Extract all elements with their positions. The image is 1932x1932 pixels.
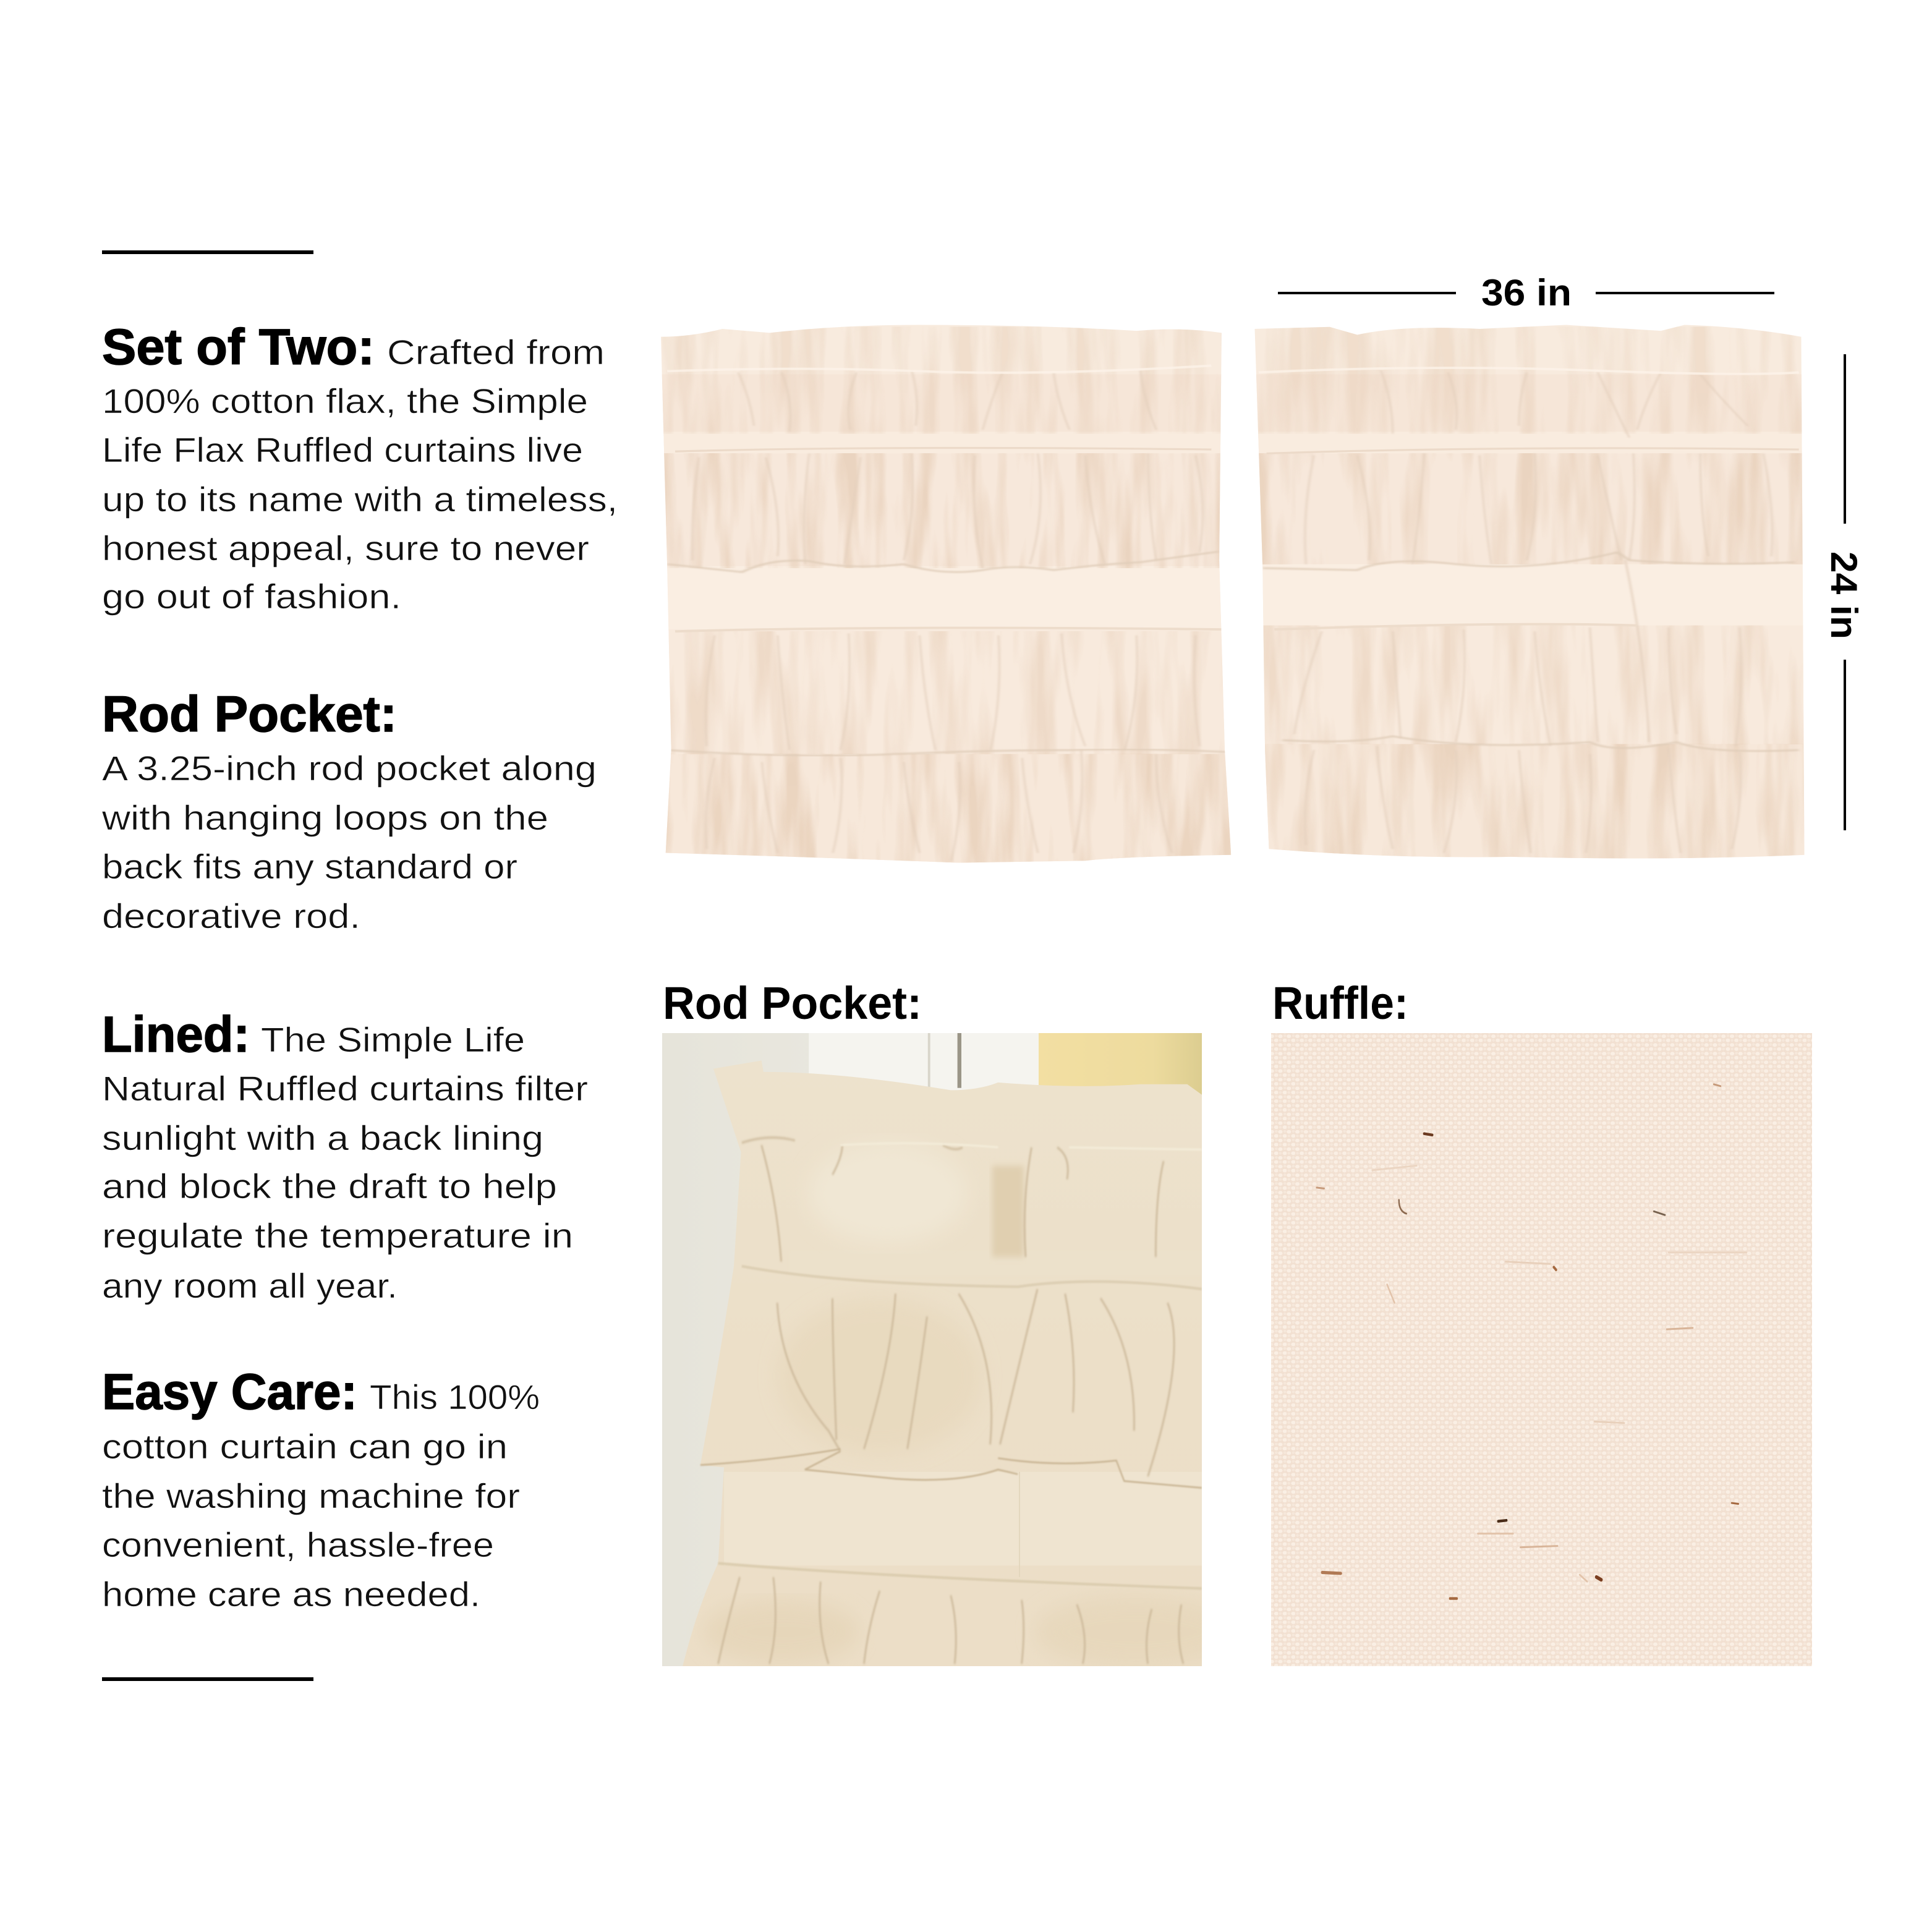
text block: Set of Two: go out of fashion. xyxy=(102,577,401,616)
text block: Rod Pocket: Rod Pocket: xyxy=(102,686,397,743)
text block: Lined xyxy=(102,1006,588,1305)
left curtain panel xyxy=(644,319,1259,872)
gather lines and hems xyxy=(700,1143,1202,1588)
text block: Lined: regulate the temperature in xyxy=(102,1216,573,1255)
text block: Set of Two: 100% cotton flax, the Simple xyxy=(102,381,588,420)
text block: Easy Care: the washing machine for xyxy=(102,1476,520,1515)
text block: Lined: Natural Ruffled curtains filter xyxy=(102,1069,588,1108)
text block: Set of Two: honest appeal, sure to never xyxy=(102,529,589,568)
pleats xyxy=(718,1138,1183,1664)
dimension: width 36 in: 36 in xyxy=(1481,272,1572,313)
text block: Lined: and block the draft to help xyxy=(102,1167,557,1206)
text block: Lined: Lined: xyxy=(102,1006,250,1063)
right curtain panel xyxy=(1251,319,1819,872)
text block: Set of Two: Set of Two: xyxy=(102,319,375,375)
text block: Easy Care: cotton curtain can go in xyxy=(102,1427,508,1466)
photo: pair of ruffled curtain panels xyxy=(661,325,1804,863)
text block: Rod Pocket: back fits any standard or xyxy=(102,847,517,886)
text block: Set of Two: up to its name with a timeless, xyxy=(102,480,618,519)
text block: Lined: The Simple Life xyxy=(261,1020,525,1059)
window frame xyxy=(809,1033,1202,1120)
caption: Rod Pocket: Rod Pocket: xyxy=(663,977,922,1029)
text block: Rod Pocket: with hanging loops on the xyxy=(101,798,548,837)
tier shading xyxy=(724,1472,1202,1565)
bottom rule xyxy=(102,1677,313,1681)
text block: Set of Two: Crafted from xyxy=(387,333,605,372)
text block: Easy Care: This 100% xyxy=(370,1377,540,1416)
photo: ruffle fabric weave close-up xyxy=(1271,1033,1812,1666)
text block: Easy Care: convenient, hassle-free xyxy=(102,1525,494,1564)
text block: Set of Two xyxy=(102,319,618,616)
text block: Rod Pocket: A 3.25-inch rod pocket along xyxy=(102,749,597,788)
dimension: height 24 in xyxy=(1823,354,1865,830)
photo: rod pocket close-up xyxy=(662,1033,1202,1666)
text block: Rod Pocket xyxy=(101,686,597,935)
caption: Ruffle: Ruffle: xyxy=(1272,977,1408,1029)
text block: Easy Care: home care as needed. xyxy=(102,1575,480,1614)
text block: Set of Two: Life Flax Ruffled curtains live xyxy=(102,430,583,469)
text block: Rod Pocket: decorative rod. xyxy=(102,896,360,935)
text block: Lined: sunlight with a back lining xyxy=(102,1118,543,1157)
dimension: height 24 in: 24 in xyxy=(1823,551,1865,639)
flax flecks xyxy=(1317,1084,1747,1599)
text block: Lined: any room all year. xyxy=(102,1266,398,1305)
curtain fabric xyxy=(683,1060,1238,1669)
text block: Easy Care xyxy=(102,1364,540,1614)
top rule xyxy=(102,250,313,254)
dimension: width 36 in xyxy=(1278,272,1774,313)
text block: Easy Care: Easy Care: xyxy=(102,1364,357,1420)
